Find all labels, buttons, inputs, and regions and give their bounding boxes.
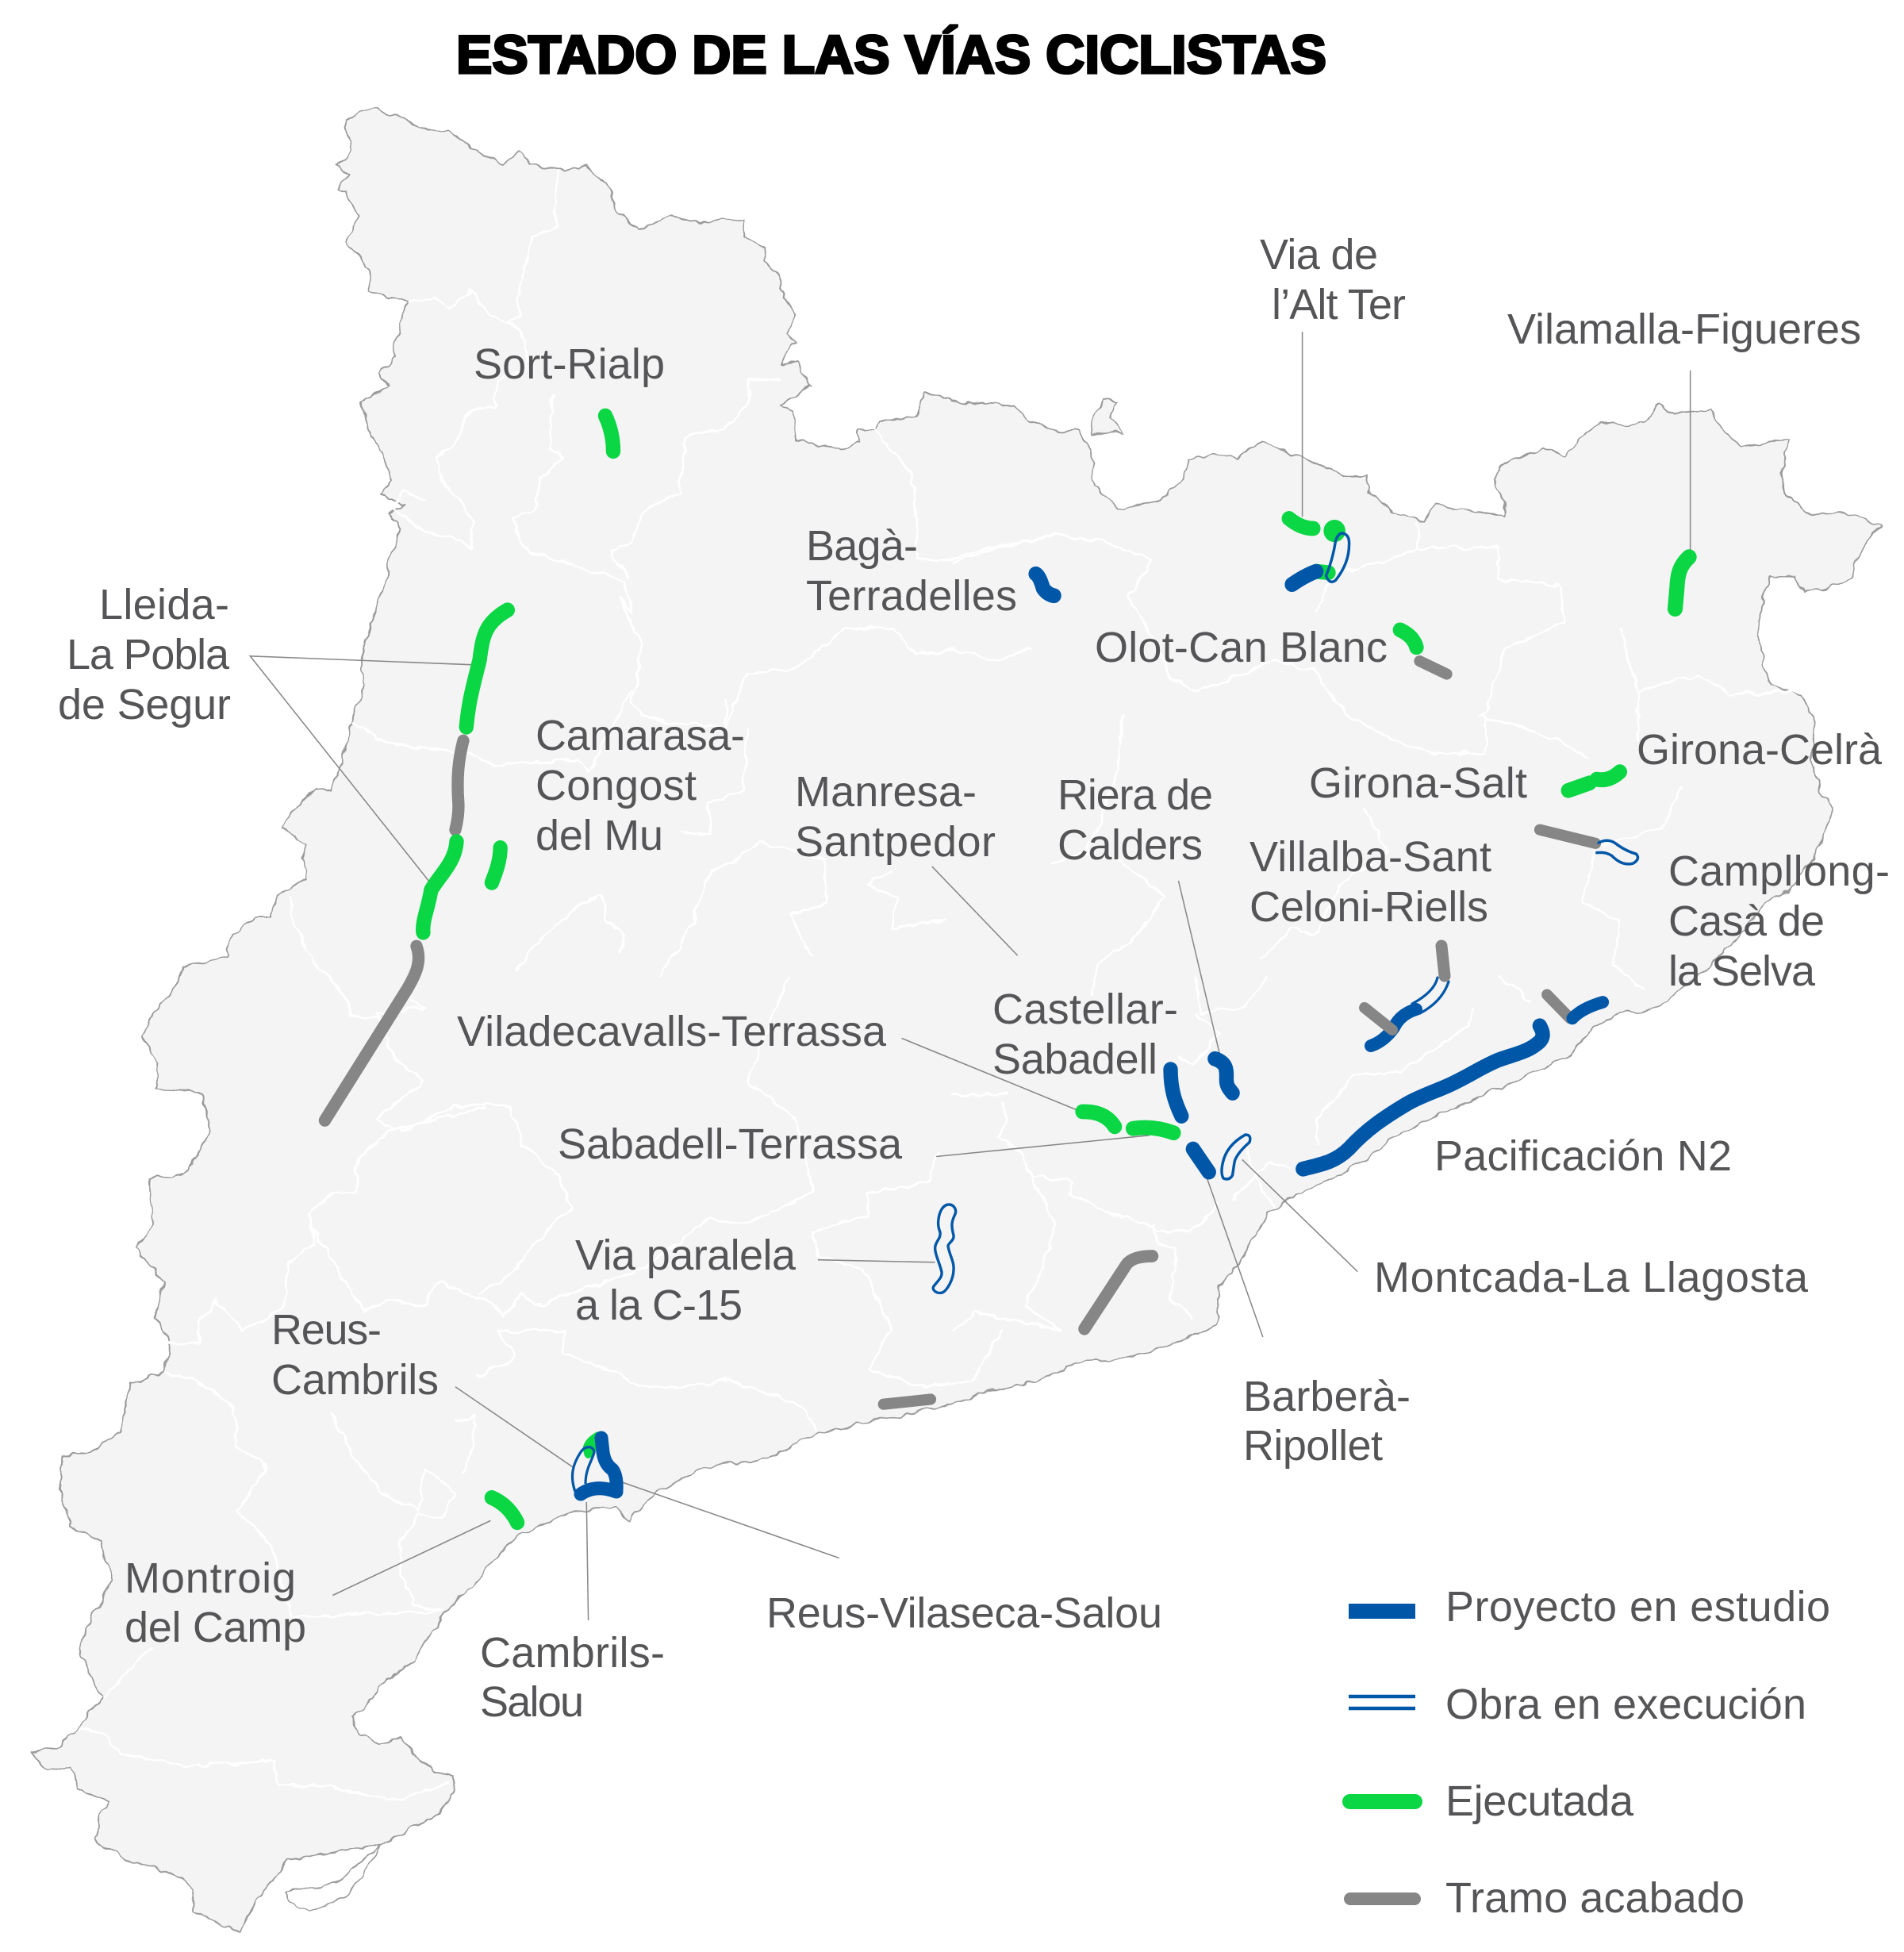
label: Pacificación N2: Pacificación N2 bbox=[1434, 1132, 1732, 1180]
label: Villalba-Sant Celoni-Riells: Villalba-Sant bbox=[1250, 833, 1491, 881]
leader: Reus-Cambrils bbox=[455, 1387, 574, 1468]
label: Bagà-Terradelles bbox=[806, 522, 1017, 620]
label: Sabadell-Terrassa: Sabadell-Terrassa bbox=[558, 1120, 903, 1168]
route: Montcada-La Llagosta bbox=[1222, 1135, 1250, 1179]
legend text: Proyecto en estudio: Proyecto en estudio bbox=[1445, 1583, 1830, 1631]
route: Lleida-La Pobla south bbox=[423, 842, 457, 932]
label: Vilamalla-Figueres: Vilamalla-Figueres bbox=[1507, 305, 1861, 353]
label: Campllong-Casà de la Selva: Casà de bbox=[1668, 897, 1825, 945]
leader: Barberà-Ripollet bbox=[1207, 1178, 1263, 1337]
route: Lleida finished long bbox=[324, 946, 419, 1120]
label: Cambrils-Salou: Salou bbox=[480, 1678, 584, 1726]
label: Via de l'Alt Ter: Via de bbox=[1260, 231, 1378, 279]
label: Camarasa-Congost del Mu: Congost bbox=[536, 762, 697, 809]
label: Lleida-La Pobla de Segur: La Pobla bbox=[67, 631, 230, 678]
route: Reus-Cambrils-Salou cluster bbox=[572, 1431, 616, 1494]
label: Barberà-Ripollet: Ripollet bbox=[1243, 1422, 1383, 1470]
leader lines bbox=[250, 332, 1691, 1620]
label: Cambrils-Salou: Cambrils- bbox=[480, 1629, 665, 1677]
label: Manresa-Santpedor: Manresa- bbox=[795, 768, 977, 816]
label: Via de l'Alt Ter bbox=[1260, 231, 1406, 329]
label: Montroig del Camp bbox=[125, 1554, 306, 1651]
label: Via paralela a la C-15: Via paralela bbox=[575, 1232, 797, 1279]
leader: Sabadell-Terrassa bbox=[936, 1135, 1150, 1156]
leader: Vilamalla-Figueres bbox=[1690, 371, 1691, 551]
route: Viladecavalls-Terrassa bbox=[1083, 1112, 1115, 1127]
label: Barberà-Ripollet bbox=[1243, 1373, 1411, 1470]
route: Via paralela a la C-15 bbox=[933, 1205, 956, 1293]
route: Olot-Can Blanc finished bbox=[1419, 661, 1447, 674]
route: Lleida-La Pobla north bbox=[466, 610, 508, 727]
leader: Lleida-La Pobla de Segur bbox=[250, 656, 474, 884]
route: Lleida-La Pobla finished bbox=[455, 740, 463, 830]
label: Olot-Can Blanc: Olot-Can Blanc bbox=[1095, 624, 1388, 671]
label: Girona-Celrà: Girona-Celrà bbox=[1637, 726, 1883, 774]
route: coast finished bbox=[1547, 995, 1570, 1018]
leader: Via de l'Alt Ter bbox=[1302, 332, 1303, 517]
route: Alt Ter project bbox=[1292, 571, 1316, 585]
label: Manresa-Santpedor bbox=[795, 768, 996, 866]
label: Lleida-La Pobla de Segur: de Segur bbox=[58, 681, 231, 728]
route: Alt Ter green lower bbox=[1316, 571, 1328, 573]
route: Girona-Celrà bbox=[1597, 772, 1620, 780]
route: Vilamalla-Figueres bbox=[1675, 557, 1689, 609]
leader: Montroig del Camp bbox=[332, 1520, 490, 1596]
label: Camarasa-Congost del Mu: Camarasa- bbox=[536, 712, 745, 759]
label: Campllong-Casà de la Selva bbox=[1668, 847, 1890, 995]
route: Alt Ter blob bbox=[1323, 520, 1345, 542]
label: Villalba-Sant Celoni-Riells bbox=[1250, 833, 1491, 931]
label: Bagà-Terradelles: Terradelles bbox=[806, 572, 1017, 620]
route: Pacificación N2 bbox=[1303, 1026, 1543, 1169]
label: Campllong-Casà de la Selva: la Selva bbox=[1668, 947, 1816, 995]
county borders bbox=[79, 169, 1802, 1800]
label: Castellar-Sabadell: Sabadell bbox=[992, 1036, 1157, 1083]
label: Montcada-La Llagosta: Montcada-La Llagosta bbox=[1374, 1254, 1809, 1301]
finished top bbox=[1441, 946, 1445, 976]
leader: Manresa-Santpedor bbox=[932, 866, 1018, 955]
route: Riera de Calders bbox=[1215, 1059, 1233, 1093]
leader: Cambrils-Salou bbox=[586, 1502, 589, 1620]
leader: Riera de Calders bbox=[1178, 881, 1220, 1057]
route: Villalba-Sant Celoni-Riells bbox=[1365, 946, 1449, 1046]
route: finished Garraf bbox=[1084, 1256, 1153, 1329]
route: Campllong finished bbox=[1540, 830, 1595, 843]
route: Castellar-Sabadell bbox=[1171, 1070, 1181, 1116]
route: Sort-Rialp bbox=[605, 416, 613, 451]
works loop bbox=[572, 1447, 594, 1492]
label: Castellar-Sabadell bbox=[992, 986, 1178, 1083]
label: Montroig del Camp: Montroig bbox=[125, 1554, 296, 1602]
label: Lleida-La Pobla de Segur bbox=[58, 581, 231, 728]
leader: Via paralela a la C-15 bbox=[818, 1260, 935, 1262]
leader: Viladecavalls-Terrassa bbox=[901, 1038, 1077, 1110]
label: Lleida-La Pobla de Segur: Lleida- bbox=[99, 581, 229, 628]
route: Camarasa-Congost del Mu bbox=[492, 847, 501, 882]
legend bbox=[1342, 1583, 1830, 1922]
label: Barberà-Ripollet: Barberà- bbox=[1243, 1373, 1411, 1420]
label: Via de l'Alt Ter: l’Alt Ter bbox=[1272, 281, 1406, 329]
label: Camarasa-Congost del Mu: del Mu bbox=[536, 812, 663, 859]
label: Castellar-Sabadell: Castellar- bbox=[992, 986, 1178, 1033]
label: Villalba-Sant Celoni-Riells: Celoni-Riells bbox=[1250, 883, 1488, 931]
route: Alt Ter works bbox=[1326, 533, 1349, 582]
route: Olot-Can Blanc green bbox=[1400, 630, 1416, 647]
route: Barberà-Ripollet bbox=[1193, 1149, 1209, 1172]
route: Girona-Salt bbox=[1568, 783, 1590, 790]
label: Reus-Cambrils: Reus- bbox=[271, 1306, 382, 1354]
project section bbox=[1371, 1009, 1416, 1046]
legend swatch: Tramo acabado bbox=[1344, 1892, 1421, 1905]
label: Bagà-Terradelles: Bagà- bbox=[806, 522, 918, 570]
title: ESTADO DE LAS VÍAS CICLISTAS bbox=[456, 25, 1326, 85]
works outline bbox=[1412, 978, 1449, 1013]
label: Viladecavalls-Terrassa: Viladecavalls-Terrassa bbox=[457, 1008, 887, 1055]
label: Campllong-Casà de la Selva: Campllong- bbox=[1668, 847, 1890, 895]
legend swatch: Ejecutada bbox=[1342, 1794, 1422, 1809]
route: Sabadell-Terrassa bbox=[1133, 1128, 1173, 1133]
legend text: Obra en execución: Obra en execución bbox=[1445, 1681, 1806, 1728]
label: Sort-Rialp: Sort-Rialp bbox=[474, 340, 665, 388]
label: Cambrils-Salou bbox=[480, 1629, 665, 1726]
finished crossing bbox=[1365, 1008, 1392, 1030]
executed wedge bbox=[583, 1431, 597, 1458]
legend swatch: Proyecto en estudio bbox=[1349, 1604, 1415, 1619]
route: Montroig del Camp bbox=[492, 1497, 517, 1523]
legend swatch: Obra en execución bbox=[1349, 1696, 1415, 1708]
label: Via paralela a la C-15: a la C-15 bbox=[575, 1281, 743, 1329]
label: Reus-Cambrils bbox=[271, 1306, 439, 1404]
legend text: Ejecutada: Ejecutada bbox=[1445, 1777, 1634, 1825]
label: Riera de Calders: Riera de bbox=[1058, 771, 1213, 819]
legend text: Tramo acabado: Tramo acabado bbox=[1445, 1874, 1745, 1922]
route: Bagà-Terradelles bbox=[1036, 574, 1054, 596]
route: finished coast bbox=[884, 1399, 931, 1404]
label: Manresa-Santpedor: Santpedor bbox=[795, 818, 996, 866]
route: Via de l'Alt Ter green bbox=[1289, 518, 1313, 528]
leader: Reus-Vilaseca-Salou bbox=[616, 1480, 839, 1558]
route: coast project bbox=[1572, 1002, 1603, 1018]
project section bbox=[581, 1438, 616, 1494]
label: Reus-Vilaseca-Salou: Reus-Vilaseca-Salou bbox=[766, 1589, 1162, 1637]
label: Via paralela a la C-15 bbox=[575, 1232, 797, 1329]
cycling routes bbox=[324, 416, 1689, 1523]
leader: Montcada-La Llagosta bbox=[1242, 1159, 1357, 1272]
label: Montroig del Camp: del Camp bbox=[125, 1604, 306, 1651]
label: Camarasa-Congost del Mu bbox=[536, 712, 745, 859]
label: Girona-Salt: Girona-Salt bbox=[1309, 759, 1527, 807]
Ebre delta spit bbox=[286, 1844, 382, 1912]
route: Campllong works bbox=[1597, 840, 1637, 864]
label: Riera de Calders bbox=[1058, 771, 1213, 869]
label: Reus-Cambrils: Cambrils bbox=[271, 1356, 439, 1404]
Val d'Aran enclave island bbox=[1090, 398, 1124, 434]
label: Riera de Calders: Calders bbox=[1058, 821, 1203, 869]
